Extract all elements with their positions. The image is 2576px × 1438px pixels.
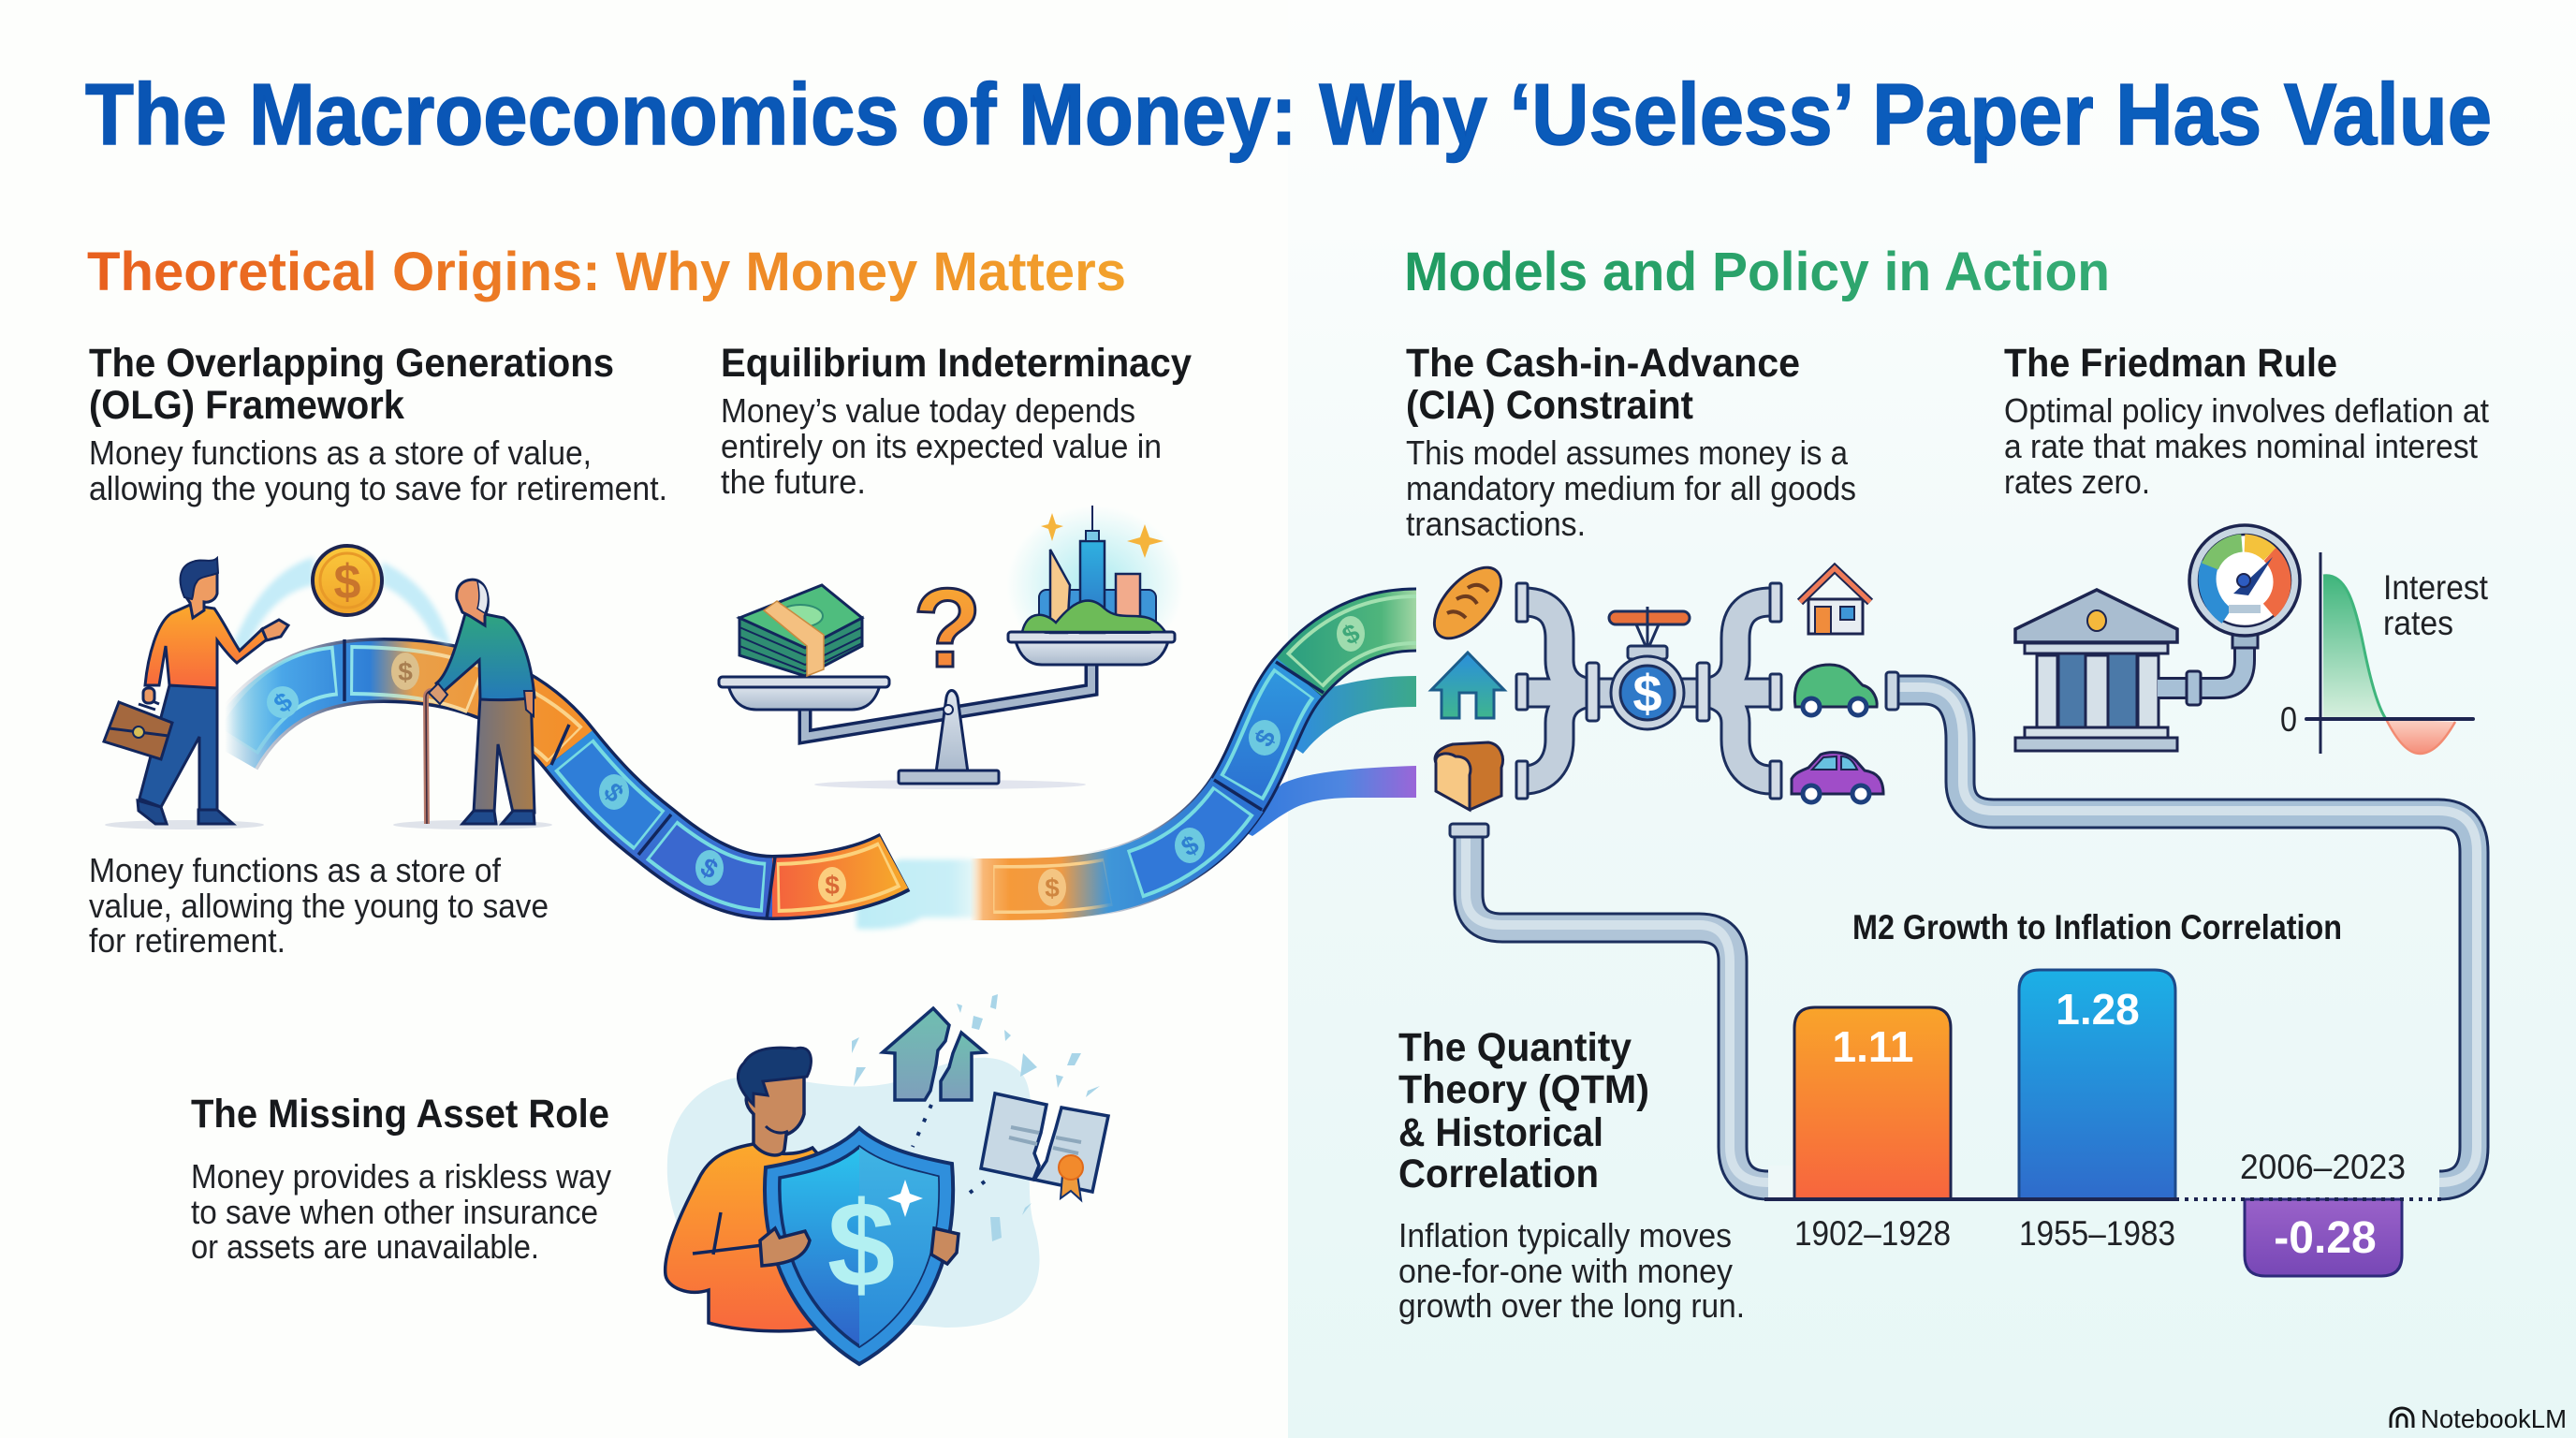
briefcase [139, 697, 159, 710]
bill 7 orange fading [992, 869, 1109, 906]
text block: quantity theory: Correlation [1398, 1152, 1599, 1196]
text block: cash-in-advance: mandatory medium for all goods [1406, 469, 1856, 507]
cash stack [739, 618, 862, 676]
bill 5 [655, 835, 772, 888]
broken house [883, 1008, 949, 1100]
text block: missing asset role: to save when other insurance [191, 1193, 598, 1231]
text block: cash-in-advance: This model assumes money is a [1406, 433, 1849, 472]
money ribbon: branch teal [1282, 676, 1416, 754]
text block: equilibrium indeterminacy: Money’s value today depends [721, 391, 1135, 430]
bar 1955–1983: 1955–1983 [2019, 1214, 2175, 1253]
debris shards [852, 994, 1100, 1241]
bill 1: $ [269, 686, 298, 718]
text block: store of value caption: for retirement. [89, 921, 285, 960]
text block: store of value caption [89, 851, 549, 960]
beam [805, 665, 1091, 737]
icon: coin with motion arcs: $ [334, 555, 361, 609]
icon: balance scale with cash and city [719, 506, 1184, 789]
icon: orange roof house [1800, 568, 1870, 634]
hair [181, 558, 218, 599]
chart: interest rates: 0 [2280, 700, 2297, 739]
bill 4: $ [598, 777, 630, 808]
text block: cash-in-advance: (CIA) Constraint [1406, 383, 1693, 428]
valve and distribution pipes [1516, 583, 1781, 799]
illustration: person holding shield [666, 994, 1108, 1364]
sweater [436, 610, 534, 700]
icon: old man with cane [393, 580, 552, 829]
shield [765, 1128, 953, 1364]
hand [262, 620, 288, 640]
text block: missing asset role: or assets are unavailable. [191, 1227, 539, 1266]
valve and distribution pipes: $ [1632, 664, 1662, 723]
text block: quantity theory: The Quantity [1398, 1025, 1632, 1070]
bill 5: $ [696, 852, 723, 885]
bill 2 [344, 653, 487, 695]
text block: missing asset role [191, 1092, 611, 1266]
sparkles [1041, 513, 1063, 541]
shirt [145, 605, 267, 688]
bar 2006–2023 [2240, 1148, 2406, 1276]
text block: friedman rule: a rate that makes nominal interest [2004, 427, 2478, 465]
text block: quantity theory: Inflation typically moves [1398, 1216, 1732, 1255]
bar chart: M2 to inflation correlation [1764, 970, 2443, 1276]
hair [738, 1048, 811, 1105]
bill 9 [1237, 677, 1299, 795]
text block: store of value caption: value, allowing the young to save [89, 887, 549, 925]
dotted crack lines [913, 1105, 985, 1198]
text block: OLG framework: allowing the young to save for retirement. [89, 469, 667, 507]
icon: bread loaf [1422, 556, 1514, 650]
text block: equilibrium indeterminacy [721, 341, 1192, 501]
text block: OLG framework: (OLG) Framework [89, 383, 404, 428]
bill 8: $ [1177, 829, 1204, 862]
money ribbon: branch purple [1237, 766, 1416, 836]
text block: missing asset role: Money provides a riskless way [191, 1157, 611, 1196]
bill 7 orange fading: $ [1045, 873, 1060, 902]
money ribbon: right section [970, 616, 1416, 906]
text block: cash-in-advance: transactions. [1406, 505, 1586, 543]
text block: friedman rule: Optimal policy involves deflation at [2004, 391, 2489, 430]
bar 1902–1928: 1902–1928 [1794, 1214, 1951, 1253]
trousers [474, 691, 534, 813]
text block: OLG framework [89, 341, 667, 507]
trousers [139, 685, 217, 813]
watermark: NotebookLM: NotebookLM [2421, 1404, 2567, 1433]
icon: bread slice [1435, 742, 1502, 810]
bar 1955–1983: 1.28 [2056, 985, 2140, 1034]
valve body [1611, 656, 1684, 729]
text block: quantity theory [1398, 1025, 1745, 1325]
pipe: to central bank to bar chart right [1886, 672, 2477, 1185]
text block: cash-in-advance: The Cash-in-Advance [1406, 341, 1800, 386]
text block: friedman rule [2004, 341, 2489, 501]
chart: interest rates: Interest [2383, 568, 2489, 607]
hands [760, 1228, 810, 1266]
neck and face [184, 573, 217, 618]
body [666, 1144, 824, 1331]
shoes [138, 800, 233, 824]
text block: quantity theory: one-for-one with money [1398, 1252, 1733, 1290]
bill 6 orange end: $ [825, 871, 840, 900]
bill 10 green: $ [1338, 618, 1365, 651]
cane [426, 691, 442, 824]
section heading: theoretical origins: Theoretical Origins: Why Money Matters [87, 242, 1126, 302]
text block: equilibrium indeterminacy: Equilibrium Indeterminacy [721, 341, 1192, 386]
glow behind city [1006, 506, 1184, 665]
chart: interest rates: rates [2383, 604, 2453, 642]
hand [429, 683, 447, 704]
bill 2: $ [398, 657, 413, 686]
chart title: M2 Growth to Inflation Correlation [1852, 908, 2342, 946]
fading ribbon link [856, 859, 975, 929]
head [457, 580, 488, 625]
pipe: bread to bar chart left [1450, 824, 1768, 1185]
bill 3 orange [487, 695, 569, 749]
bill 8 [1128, 795, 1237, 876]
neck and face [746, 1070, 804, 1155]
icon: teal house [1431, 653, 1504, 718]
broken certificate [981, 1093, 1046, 1180]
bar 1955–1983 [2019, 970, 2175, 1253]
icon: young man with briefcase [104, 558, 288, 829]
illustration: person holding shield: $ [827, 1176, 895, 1313]
bar 2006–2023: 2006–2023 [2240, 1148, 2406, 1186]
question mark: ? [913, 565, 982, 691]
shoes [462, 811, 534, 824]
pale blob [667, 1058, 1040, 1328]
bar 1902–1928 [1794, 1007, 1951, 1253]
section heading: models and policy: Models and Policy in Action [1404, 242, 2110, 302]
flanges [1516, 583, 1781, 799]
text block: OLG framework: The Overlapping Generations [89, 341, 614, 386]
icon: purple car [1792, 753, 1883, 802]
money ribbon: left section [229, 639, 895, 919]
city [1091, 506, 1093, 531]
pillar [936, 691, 968, 772]
text block: friedman rule: The Friedman Rule [2004, 341, 2337, 386]
bar 2006–2023: -0.28 [2274, 1213, 2377, 1263]
bar 1902–1928: 1.11 [1833, 1022, 1913, 1071]
bill 6 orange end [772, 862, 894, 902]
chart: interest rates [2280, 552, 2489, 754]
text block: equilibrium indeterminacy: the future. [721, 462, 866, 501]
left pan [728, 685, 880, 710]
text block: store of value caption: Money functions as a store of [89, 851, 502, 889]
bill 10 green [1299, 616, 1416, 677]
text block: equilibrium indeterminacy: entirely on its expected value in [721, 427, 1162, 465]
bill 9: $ [1249, 725, 1281, 751]
icon: coin with motion arcs [229, 546, 451, 655]
bill 1 [232, 670, 344, 749]
text block: quantity theory: Theory (QTM) [1398, 1067, 1649, 1112]
text block: cash-in-advance [1406, 341, 1856, 543]
text block: OLG framework: Money functions as a store of value, [89, 433, 592, 472]
icon: central bank building [2015, 590, 2177, 751]
right pan [1016, 641, 1168, 665]
bill 4 [569, 749, 655, 835]
text block: quantity theory: & Historical [1398, 1110, 1603, 1155]
handle [1609, 611, 1690, 624]
text block: friedman rule: rates zero. [2004, 462, 2150, 501]
text block: missing asset role: The Missing Asset Role [191, 1092, 609, 1137]
icon: pressure gauge with pipe [2158, 525, 2300, 705]
icon: green car [1794, 665, 1877, 715]
text block: quantity theory: growth over the long run. [1398, 1286, 1745, 1325]
